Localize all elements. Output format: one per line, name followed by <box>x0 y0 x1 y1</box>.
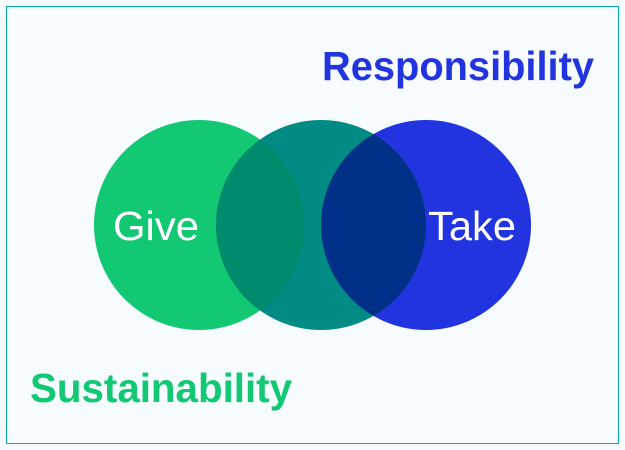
label: Give: Give <box>113 203 199 249</box>
overlap: give and middle <box>216 140 304 310</box>
circle: take <box>321 120 531 330</box>
heading: Sustainability: Sustainability <box>30 365 292 411</box>
venn diagram <box>94 120 531 330</box>
heading: Responsibility: Responsibility <box>322 43 594 89</box>
label: Take: Take <box>428 203 516 249</box>
circle: give <box>94 120 304 330</box>
circle: middle <box>216 120 426 330</box>
overlap: middle and take <box>321 134 426 316</box>
